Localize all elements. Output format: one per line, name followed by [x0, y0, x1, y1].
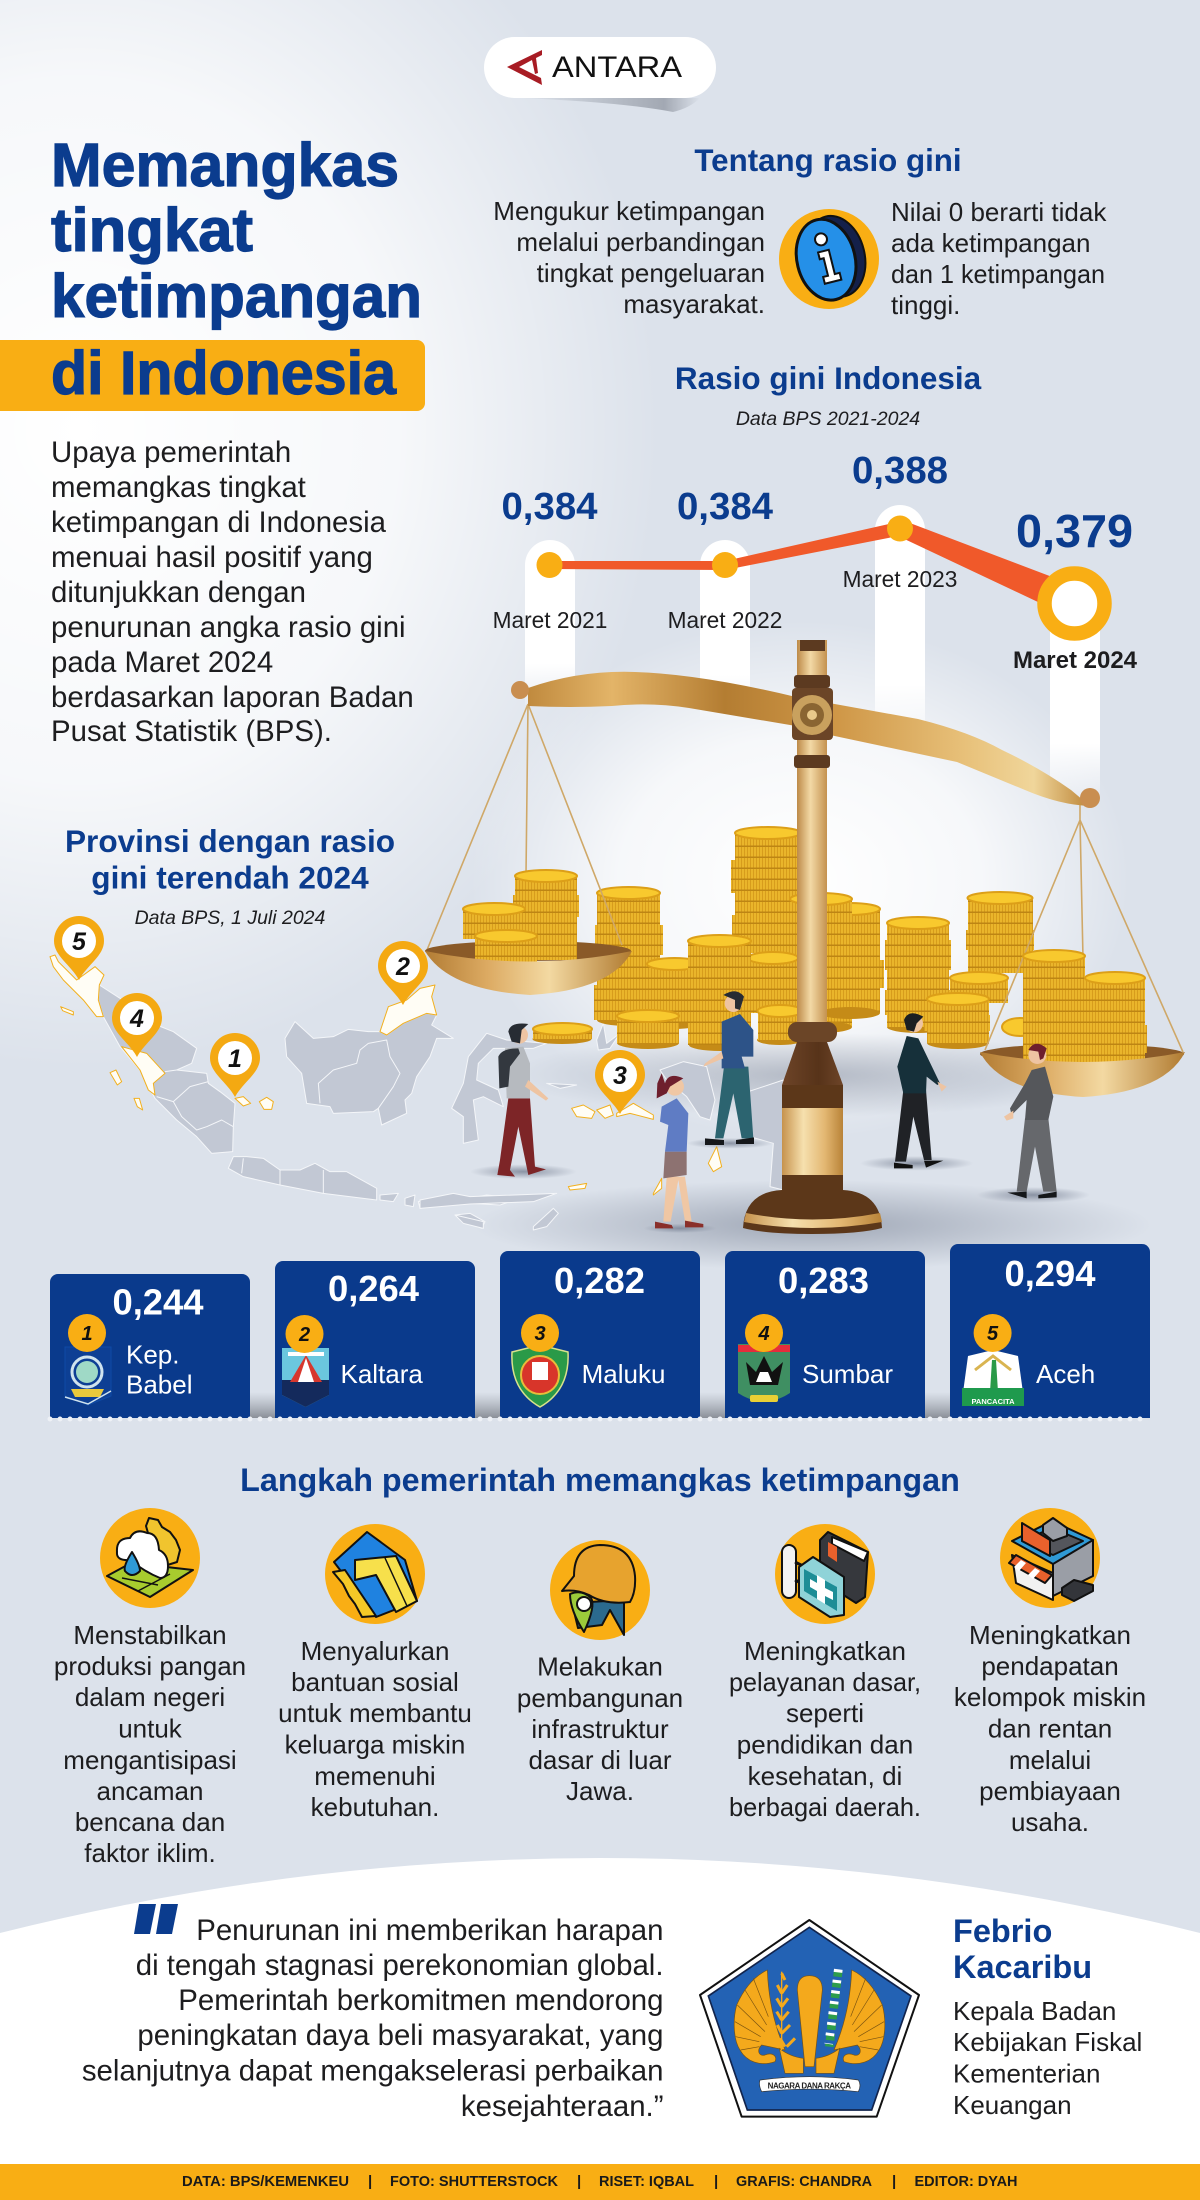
text: keluarga miskin	[285, 1730, 465, 1760]
text: untuk	[118, 1714, 183, 1744]
intro text: ditunjukkan dengan	[51, 576, 306, 609]
footer: GRAFIS: CHANDRA	[736, 2173, 872, 2190]
intro text: berdasarkan laporan Badan	[51, 681, 414, 714]
footer: FOTO: SHUTTERSTOCK	[390, 2173, 558, 2190]
text: untuk membantu	[278, 1698, 472, 1728]
text: kebutuhan.	[311, 1792, 439, 1822]
text: pembiayaan	[979, 1776, 1121, 1806]
pin 1: 1	[228, 1045, 242, 1073]
pin 4: 4	[129, 1005, 144, 1033]
rice	[780, 1972, 784, 2050]
text: definition right	[891, 197, 1107, 320]
heading: provinsi: gini terendah 2024	[91, 860, 369, 896]
chart heading: Rasio gini Indonesia	[675, 360, 982, 396]
text: definition left: Mengukur ketimpangan	[493, 196, 765, 226]
footer	[0, 2164, 1200, 2200]
footer: |	[892, 2173, 896, 2190]
wing left	[734, 1970, 785, 2064]
scale: pole, beam and base	[511, 640, 1100, 1234]
text	[954, 1620, 1146, 1837]
text: melalui	[1009, 1745, 1091, 1775]
person: woman	[643, 1073, 717, 1233]
text: dan rentan	[988, 1714, 1112, 1744]
footer: |	[577, 2173, 581, 2190]
scale: right pan with coins	[980, 950, 1185, 1097]
pin 1	[210, 1033, 260, 1097]
point 2024: 0,379	[1016, 505, 1133, 557]
white chart column: Maret 2023	[875, 505, 925, 745]
quote text: kesejahteraan.”	[461, 2090, 664, 2123]
text	[517, 1652, 683, 1806]
quote text	[82, 1914, 664, 2123]
point 2023: Maret 2023	[843, 566, 957, 592]
title: tingkat	[51, 196, 253, 264]
emblem: Sumbar	[738, 1344, 790, 1402]
icon: store	[1000, 1508, 1100, 1608]
title: Memangkas	[51, 131, 399, 199]
footer: RISET: IQBAL	[599, 2173, 694, 2190]
heading: langkah: Langkah pemerintah memangkas ketimpangan	[240, 1462, 960, 1498]
wing bases	[779, 2048, 840, 2073]
Maluku highlighted	[568, 1103, 722, 1195]
text: definition right: tinggi.	[891, 290, 960, 320]
text: pendapatan	[981, 1651, 1119, 1681]
point 2024	[1013, 505, 1138, 674]
text: pembangunan	[517, 1683, 683, 1713]
coin stacks: background	[532, 827, 1038, 1051]
text: kesehatan, di	[748, 1761, 902, 1791]
text: pendidikan dan	[737, 1730, 913, 1760]
emblem: Babel	[65, 1347, 111, 1405]
person: man in dark suit	[860, 1013, 973, 1171]
trend line	[549, 520, 1076, 620]
speaker	[953, 1913, 1142, 2120]
card: Kaltara: Kaltara	[340, 1359, 423, 1389]
panel: quote background	[0, 1858, 1200, 2200]
emblem: Kaltara	[282, 1348, 329, 1407]
text: definition right: ada ketimpangan	[891, 228, 1090, 258]
text: mengantisipasi	[63, 1745, 237, 1775]
pin 3: 3	[613, 1062, 627, 1090]
text: definition left: tingkat pengeluaran	[537, 258, 765, 288]
step 1: pangan	[54, 1508, 246, 1868]
speaker: Kebijakan Fiskal	[953, 2027, 1142, 2057]
card: Sumbar	[725, 1251, 925, 1418]
Babel highlighted	[235, 1097, 273, 1109]
quote text: peningkatan daya beli masyarakat, yang	[137, 2019, 664, 2052]
badge 1	[68, 1314, 106, 1352]
Maluku Utara	[547, 1023, 620, 1088]
beam end left	[511, 681, 529, 699]
intro text: pada Maret 2024	[51, 646, 273, 679]
panel: tentang rasio gini	[493, 143, 1107, 320]
card: Kep. Babel: Babel	[126, 1370, 192, 1400]
text: berbagai daerah.	[729, 1792, 921, 1822]
point 2022	[668, 485, 782, 633]
text: pelayanan dasar,	[729, 1667, 921, 1697]
quote text: selanjutnya dapat mengakselerasi perbaikan	[82, 2054, 664, 2088]
beam end right	[1080, 788, 1100, 808]
point 2024: Maret 2024	[1013, 647, 1138, 674]
badge 3	[521, 1314, 559, 1352]
chart: rasio gini Indonesia	[493, 360, 1138, 674]
white chart column: Maret 2024	[1050, 575, 1100, 800]
top cap	[800, 640, 825, 651]
intro text: Pusat Statistik (BPS).	[51, 715, 332, 748]
person: backpack man	[470, 1024, 577, 1179]
pin 5	[54, 916, 104, 980]
speaker: Kacaribu	[953, 1949, 1092, 1985]
text: definition right: Nilai 0 berarti tidak	[891, 197, 1107, 227]
text: bencana dan	[75, 1807, 225, 1837]
center bar	[797, 1976, 822, 2067]
pin 2: 2	[395, 953, 410, 981]
white chart column: Maret 2021	[525, 540, 575, 705]
pin 3	[595, 1050, 645, 1114]
heading: provinsi: Provinsi dengan rasio	[65, 823, 395, 859]
card: Kep. Babel: Kep.	[126, 1340, 180, 1370]
card perforation	[50, 1416, 1150, 1422]
point 2021	[493, 485, 607, 633]
title: ketimpangan	[51, 262, 422, 330]
intro text	[51, 436, 414, 748]
badge 2	[286, 1315, 324, 1353]
text: bantuan sosial	[291, 1667, 459, 1697]
heading: provinsi	[65, 823, 395, 929]
base column	[743, 1022, 882, 1234]
point 2021: Maret 2021	[493, 607, 607, 633]
pin 4	[112, 993, 162, 1057]
intro text: Upaya pemerintah	[51, 436, 291, 469]
icon: info coin	[779, 209, 879, 309]
text: definition right: dan 1 ketimpangan	[891, 259, 1105, 289]
intro text: penurunan angka rasio gini	[51, 611, 406, 644]
icon: helmet and map	[550, 1540, 650, 1640]
quote mark	[134, 1904, 178, 1934]
icon: handshake	[325, 1524, 425, 1624]
card: Kaltara: 0,264	[328, 1268, 420, 1309]
card: Maluku: 0,282	[554, 1260, 645, 1301]
Sumbar highlighted	[61, 1007, 165, 1110]
logo: Kementerian Keuangan	[700, 1920, 919, 2117]
Aceh highlighted	[50, 955, 104, 1017]
text	[729, 1636, 921, 1822]
quote text: Pemerintah berkomitmen mendorong	[178, 1984, 664, 2017]
heading: tentang rasio gini: Tentang rasio gini	[694, 143, 962, 178]
card: Maluku: Maluku	[582, 1359, 665, 1389]
badge 5	[974, 1314, 1012, 1352]
badge 5: 5	[987, 1323, 999, 1345]
logo: Antara: ANTARA	[552, 51, 682, 84]
text: kelompok miskin	[954, 1682, 1146, 1712]
logo: Kementerian Keuangan: NAGARA DANA RAKÇA	[768, 2081, 851, 2090]
step 5: pendapatan	[954, 1508, 1146, 1837]
text: Menstabilkan	[73, 1620, 227, 1650]
text: infrastruktur	[531, 1714, 669, 1744]
quote text: Penurunan ini memberikan harapan	[196, 1914, 664, 1947]
text: ancaman	[97, 1776, 203, 1806]
icon: book and first aid	[775, 1524, 875, 1624]
intro text: memangkas tingkat	[51, 471, 306, 504]
point 2023: 0,388	[852, 449, 948, 492]
footer: DATA: BPS/KEMENKEU	[182, 2173, 349, 2190]
pin 2	[378, 941, 428, 1005]
card: Aceh: Aceh	[1036, 1359, 1095, 1389]
title: di Indonesia	[51, 339, 397, 407]
text	[278, 1636, 472, 1822]
wing right	[834, 1970, 885, 2064]
Sulawesi	[452, 1033, 547, 1143]
card: Aceh	[950, 1244, 1150, 1418]
person: man in blue shirt	[687, 991, 773, 1149]
text: produksi pangan	[54, 1651, 246, 1681]
pan strings	[427, 704, 1183, 1052]
text: usaha.	[1011, 1807, 1089, 1837]
text: seperti	[786, 1698, 864, 1728]
point 2023	[843, 449, 957, 592]
text: dalam negeri	[75, 1682, 225, 1712]
speaker: Kementerian	[953, 2058, 1100, 2088]
icon: cloud, sun and field	[100, 1508, 200, 1608]
point 2021: 0,384	[501, 485, 598, 528]
card: Kaltara	[275, 1261, 475, 1418]
card: Aceh: 0,294	[1004, 1253, 1096, 1294]
text: definition left: masyarakat.	[623, 289, 765, 319]
ribbon	[759, 2077, 860, 2092]
card: Sumbar: 0,283	[778, 1260, 869, 1301]
step 2: bantuan sosial	[278, 1524, 472, 1822]
logo: Antara	[484, 37, 716, 112]
quote text: di tengah stagnasi perekonomian global.	[136, 1949, 664, 1982]
badge 1: 1	[81, 1323, 93, 1345]
Nusa Tenggara	[380, 1193, 520, 1228]
Kalimantan	[285, 1013, 453, 1125]
text: Menyalurkan	[301, 1636, 449, 1666]
Sumatra	[98, 985, 235, 1153]
footer: |	[714, 2173, 718, 2190]
emblem: Maluku	[512, 1345, 568, 1407]
pivot block	[792, 675, 833, 768]
text: Jawa.	[566, 1776, 634, 1806]
emblem: Aceh	[962, 1350, 1024, 1406]
badge 4	[745, 1314, 783, 1352]
cotton	[829, 1969, 838, 2047]
card: Sumbar: Sumbar	[802, 1359, 893, 1389]
speaker: Kepala Badan	[953, 1996, 1116, 2026]
pin 5: 5	[72, 928, 87, 956]
point 2022: 0,384	[677, 485, 774, 528]
pole	[797, 640, 827, 1030]
speaker: Febrio	[953, 1913, 1052, 1949]
text: Meningkatkan	[969, 1620, 1131, 1650]
white chart column: Maret 2022	[700, 540, 750, 720]
point 2022: Maret 2022	[668, 607, 782, 633]
person: man in grey suit	[977, 1044, 1090, 1203]
shadows between cards	[250, 1392, 950, 1418]
Kaltara highlighted	[380, 985, 437, 1035]
text: dasar di luar	[528, 1745, 672, 1775]
intro text: ketimpangan di Indonesia	[51, 506, 387, 539]
footer: EDITOR: DYAH	[914, 2173, 1018, 2190]
beam	[528, 672, 1090, 806]
badge 2: 2	[298, 1324, 310, 1346]
speaker: Keuangan	[953, 2090, 1072, 2120]
map: Indonesia	[50, 955, 783, 1230]
text	[54, 1620, 246, 1868]
card: Maluku	[500, 1251, 700, 1418]
badge 3: 3	[534, 1323, 546, 1345]
text: memenuhi	[314, 1761, 436, 1791]
step 3: infrastruktur	[517, 1540, 683, 1806]
step 4: pelayanan dasar	[729, 1524, 921, 1822]
Papua	[420, 1062, 783, 1230]
heading: provinsi: Data BPS, 1 Juli 2024	[135, 907, 326, 929]
title	[0, 131, 425, 411]
card: Kep. Babel: 0,244	[112, 1282, 204, 1322]
card: Kep. Babel	[50, 1274, 250, 1418]
scale: left pan with coins	[425, 870, 632, 995]
footer: |	[368, 2173, 372, 2190]
Java	[228, 1157, 377, 1200]
text: Melakukan	[537, 1652, 663, 1682]
emblem: Aceh: PANCACITA	[971, 1397, 1015, 1406]
intro text: menuai hasil positif yang	[51, 541, 373, 574]
badge 4: 4	[757, 1323, 770, 1345]
text: definition left	[493, 196, 765, 319]
text: faktor iklim.	[84, 1838, 216, 1868]
text: Meningkatkan	[744, 1636, 906, 1666]
chart source: Data BPS 2021-2024	[736, 408, 920, 430]
text: definition left: melalui perbandingan	[516, 227, 765, 257]
